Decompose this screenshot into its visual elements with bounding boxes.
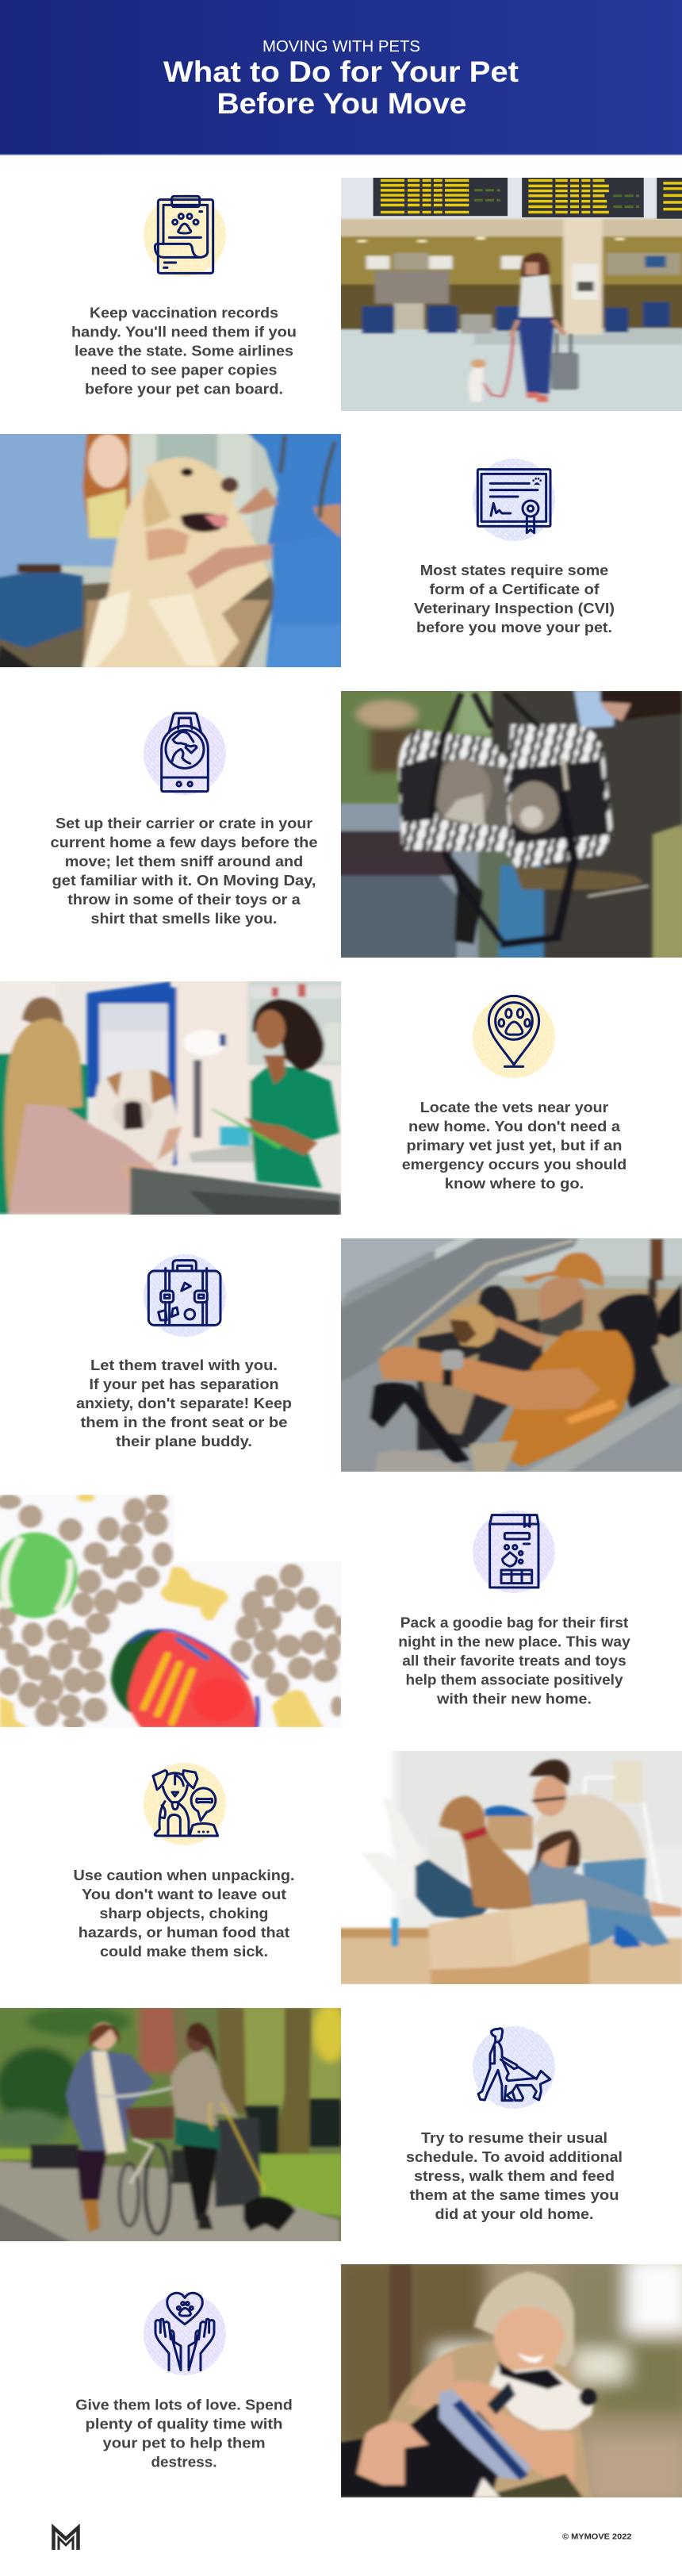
text: give them lots of love: plenty of quality time with [86, 2415, 282, 2432]
text: keep vaccination records: before your pet can board. [85, 381, 283, 397]
text: let them travel with you: If your pet has separation [89, 1376, 279, 1392]
text: keep vaccination records: need to see paper copies [90, 362, 278, 378]
photo: kibble, ball and toys [0, 1495, 341, 1727]
panel: vaccination records [71, 175, 682, 414]
photo: women walking dog in park [0, 2008, 341, 2241]
text: try to resume usual schedule [406, 2129, 623, 2222]
panel: let them travel with you [76, 1237, 682, 1473]
text: try to resume usual schedule: stress, walk them and feed [414, 2167, 615, 2184]
photo: woman hugging dog [341, 2264, 682, 2497]
text: pack a goodie bag [398, 1614, 630, 1707]
icon: pet carrier [144, 712, 226, 795]
text: pack a goodie bag: help them associate positively [406, 1671, 623, 1688]
photo: vet with bulldog [0, 981, 341, 1215]
text: give them lots of love [75, 2396, 293, 2470]
text: set up carrier: throw in some of their toys or a [67, 891, 301, 908]
text: pack a goodie bag: with their new home. [436, 1690, 592, 1707]
text: set up carrier [51, 815, 317, 927]
icon: hands holding heart with paw [144, 2293, 226, 2375]
text: locate the vets: emergency occurs you should [402, 1156, 626, 1173]
photo: couple and dog with moving box [341, 1751, 682, 1984]
text: pack a goodie bag: Pack a goodie bag for their first [400, 1614, 628, 1631]
text: try to resume usual schedule: schedule. To avoid additional [406, 2148, 623, 2165]
text: try to resume usual schedule: Try to resume their usual [421, 2129, 607, 2146]
photo: golden retriever at vet [0, 434, 341, 667]
icon: dog with bone bubble [144, 1763, 226, 1845]
text: give them lots of love: Give them lots of love. Spend [75, 2396, 293, 2413]
photo: woman and dog at airport [341, 178, 682, 411]
footer [54, 2528, 632, 2550]
panel: goodie bag [0, 1493, 630, 1729]
text: use caution when unpacking [73, 1867, 295, 1960]
text: use caution when unpacking: hazards, or human food that [79, 1924, 289, 1941]
icon: person walking a dog [473, 2026, 555, 2109]
text: let them travel with you [76, 1357, 292, 1449]
text: locate the vets [402, 1099, 626, 1192]
panel: certificate of veterinary inspection [0, 428, 615, 673]
text: certificate of veterinary inspection: form of a Certificate of [430, 581, 600, 597]
text: locate the vets: Locate the vets near your [420, 1099, 608, 1115]
text: certificate of veterinary inspection: before you move your pet. [416, 619, 612, 635]
text: keep vaccination records: Keep vaccination records [90, 305, 278, 321]
text: set up carrier: shirt that smells like you. [90, 910, 278, 927]
text: give them lots of love: your pet to help them [103, 2434, 265, 2451]
logo: MyMove M [54, 2528, 78, 2550]
text: locate the vets: know where to go. [445, 1175, 584, 1192]
panel: set up carrier [51, 686, 682, 962]
panel: caution when unpacking [73, 1746, 682, 1987]
text: use caution when unpacking: could make them sick. [100, 1943, 268, 1960]
panel: resume usual schedule [0, 2003, 623, 2246]
icon: clipboard with paw [144, 194, 226, 277]
title [163, 56, 519, 120]
text: let them travel with you: anxiety, don't separate! Keep [76, 1395, 292, 1411]
text: certificate of veterinary inspection: Veterinary Inspection (CVI) [414, 600, 615, 616]
photo: cat in zebra carrier [341, 691, 682, 958]
text: give them lots of love: destress. [151, 2453, 217, 2470]
text: set up carrier: current home a few days before the [51, 834, 317, 850]
text: use caution when unpacking: sharp objects, choking [100, 1905, 268, 1921]
text: set up carrier: move; let them sniff around and [65, 853, 303, 870]
text: pack a goodie bag: night in the new place. This way [398, 1633, 630, 1650]
text: keep vaccination records: leave the state. Some airlines [75, 343, 293, 359]
panel: locate the vets [0, 977, 626, 1217]
icon: certificate [473, 459, 555, 541]
text: set up carrier: get familiar with it. On Moving Day, [52, 872, 316, 889]
title: Before You Move [217, 87, 466, 120]
text: let them travel with you: Let them travel with you. [90, 1357, 278, 1373]
eyebrow: moving with pets: MOVING WITH PETS [262, 38, 420, 56]
text: certificate of veterinary inspection [414, 562, 615, 635]
title: What to Do for Your Pet [163, 56, 519, 88]
text: let them travel with you: them in the front seat or be [81, 1414, 287, 1430]
text: locate the vets: new home. You don't need a [408, 1118, 621, 1134]
copyright: © MYMOVE 2022 [562, 2532, 632, 2542]
text: use caution when unpacking: Use caution when unpacking. [73, 1867, 295, 1883]
text: certificate of veterinary inspection: Most states require some [420, 562, 608, 578]
text: set up carrier: Set up their carrier or crate in your [56, 815, 312, 831]
text: try to resume usual schedule: them at the same times you [409, 2186, 619, 2203]
text: keep vaccination records: handy. You'll need them if you [71, 324, 297, 340]
text: try to resume usual schedule: did at your old home. [435, 2206, 593, 2222]
panel: give them lots of love [75, 2257, 682, 2503]
text: locate the vets: primary vet just yet, but if an [406, 1137, 622, 1154]
text: keep vaccination records [71, 305, 297, 397]
icon: map pin with paw [473, 996, 555, 1078]
photo: man driving with dog [341, 1238, 682, 1472]
icon: suitcase [144, 1254, 226, 1337]
text: use caution when unpacking: You don't want to leave out [82, 1886, 286, 1902]
text: let them travel with you: their plane buddy. [116, 1433, 252, 1449]
text: pack a goodie bag: all their favorite treats and toys [402, 1652, 626, 1669]
icon: food bag [473, 1511, 555, 1593]
header banner [0, 0, 682, 155]
